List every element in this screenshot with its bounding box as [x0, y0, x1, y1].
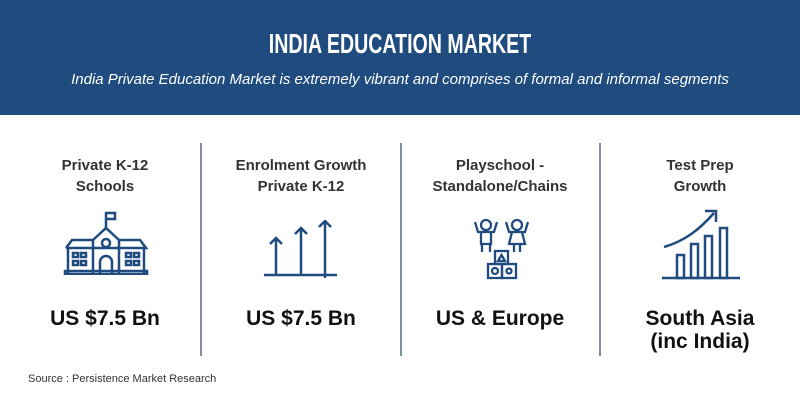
- heading: [236, 157, 366, 195]
- header banner: [0, 0, 800, 115]
- heading: Schools: [76, 178, 134, 195]
- heading: [62, 157, 148, 195]
- icon: kids with blocks: [474, 218, 530, 280]
- title: INDIA EDUCATION MARKET: [269, 28, 531, 59]
- icon: school: [64, 212, 148, 275]
- icon: bar chart with arrow: [662, 210, 740, 280]
- panel: test prep growth: [646, 157, 755, 353]
- heading: Private K-12: [258, 178, 344, 195]
- value: South Asia: [646, 307, 754, 330]
- subtitle: India Private Education Market is extremely vibrant and comprises of formal and informal segments: [71, 71, 729, 88]
- value: US $7.5 Bn: [246, 307, 356, 330]
- panel: enrolment growth: [236, 157, 366, 330]
- source note: Source : Persistence Market Research: [28, 373, 216, 385]
- panel: private k-12 schools: [50, 157, 160, 330]
- value: US $7.5 Bn: [50, 307, 160, 330]
- heading: [666, 157, 734, 195]
- heading: Standalone/Chains: [432, 178, 568, 195]
- value: (inc India): [650, 330, 750, 353]
- heading: Test Prep: [666, 157, 734, 174]
- heading: [432, 157, 568, 195]
- heading: Enrolment Growth: [236, 157, 366, 174]
- value: US & Europe: [436, 307, 564, 330]
- icon: arrows up: [264, 220, 337, 278]
- value: [646, 307, 755, 353]
- panel: playschool: [432, 157, 568, 330]
- heading: Private K-12: [62, 157, 148, 174]
- heading: Playschool -: [456, 157, 544, 174]
- heading: Growth: [674, 178, 726, 195]
